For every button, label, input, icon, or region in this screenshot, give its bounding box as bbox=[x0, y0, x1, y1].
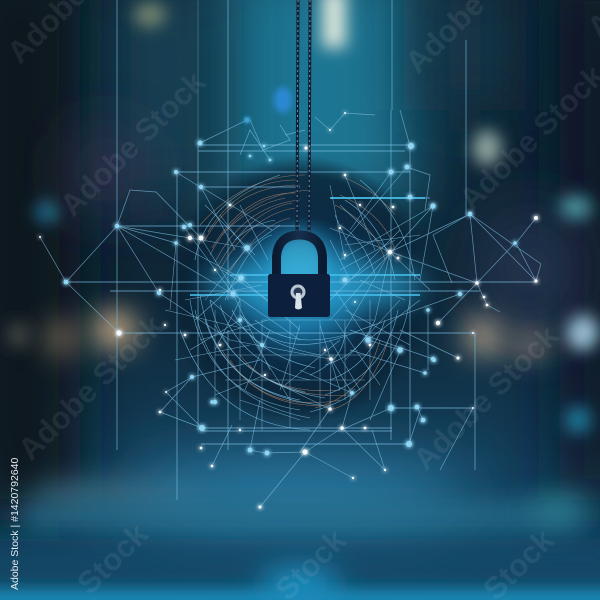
watermark: Adobe Stock bbox=[406, 318, 565, 477]
inner web lines bbox=[159, 167, 433, 430]
swirling arcs bbox=[180, 175, 415, 430]
watermark: Adobe Stock bbox=[11, 308, 170, 467]
stock credit: Adobe Stock | #1420792640 bbox=[9, 458, 21, 590]
lock shackle bbox=[276, 235, 322, 276]
watermark: Adobe Stock bbox=[53, 64, 212, 223]
keyhole bbox=[290, 284, 306, 310]
cord bbox=[297, 0, 310, 232]
network nodes bbox=[39, 112, 538, 509]
outer connecting lines bbox=[40, 110, 541, 507]
network sphere bbox=[165, 155, 435, 425]
grid of frames bbox=[66, 0, 536, 500]
padlock bbox=[268, 235, 330, 317]
watermark: Stock bbox=[70, 516, 155, 600]
lock body bbox=[268, 274, 330, 317]
